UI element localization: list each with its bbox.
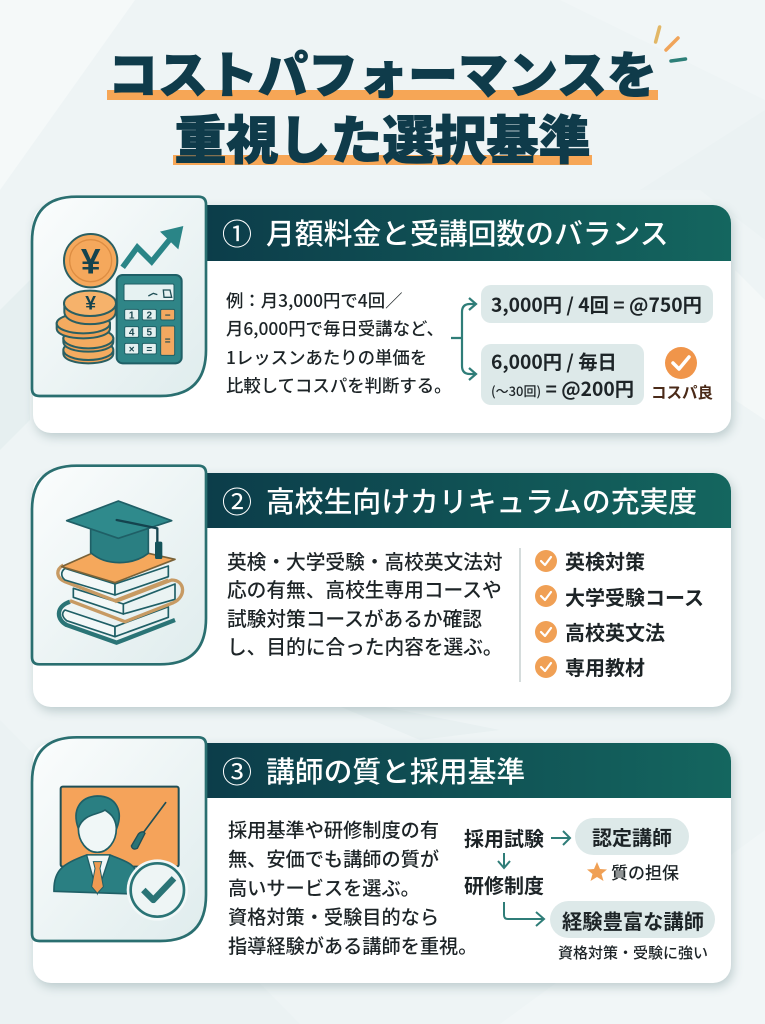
- text: 750 yen per lesson: 3,000円 / 4回 = @750円: [491, 290, 702, 318]
- text: 200 yen per lesson: [491, 347, 634, 402]
- icon: coins and calculator: =: [165, 336, 171, 347]
- text: card 2 description: 英検・大学受験・高校英文法対: [227, 546, 503, 575]
- heading: card 1: [207, 205, 731, 261]
- heading: card 2: [207, 473, 731, 528]
- pill: 6,000 yen price: [481, 344, 644, 405]
- flow: hiring exam: 採用試験: [464, 823, 544, 852]
- panel: card 2: [33, 473, 731, 707]
- text: card 2 description: し、目的に合った内容を選ぶ。: [227, 631, 503, 660]
- divider: [519, 548, 520, 682]
- pill: certified teacher: [575, 818, 689, 855]
- heading: card 3: 講師の質と採用基準: [266, 750, 525, 791]
- panel: card 3: [33, 743, 731, 983]
- icon: teacher with check: [30, 736, 208, 942]
- text: card 1 description: 例：月3,000円で4回／: [226, 288, 402, 313]
- arrow: to certified teacher: [551, 830, 572, 846]
- list item: 大学受験コース: [565, 582, 704, 611]
- icon: orange check: [665, 347, 697, 379]
- text: 200 yen per lesson: 6,000円 / 毎日: [491, 347, 617, 375]
- text: card 2 description: [227, 546, 503, 660]
- icon: coins and calculator: 5: [147, 328, 153, 339]
- heading: card 1: 月額料金と受講回数のバランス: [266, 212, 669, 253]
- heading: card 2: 高校生向けカリキュラムの充実度: [266, 480, 697, 521]
- text: card 2 description: 応の有無、高校生専用コースや: [227, 574, 502, 603]
- title underline 2: [173, 155, 592, 165]
- text: card 2 description: 試験対策コースがあるか確認: [227, 603, 482, 632]
- text: card 3 description: 資格対策・受験目的なら: [228, 902, 439, 930]
- panel: card 1: [33, 205, 731, 433]
- text: card 3 description: 高いサービスを選ぶ。: [228, 873, 420, 901]
- text: card 3 description: [228, 815, 477, 959]
- label: good value: コスパ良: [651, 381, 713, 403]
- text: strong for exams: 資格対策・受験に強い: [558, 942, 708, 963]
- icon: coins and calculator: ¥: [85, 293, 96, 314]
- title line 2: 重視した選択基準: [174, 99, 590, 174]
- flow: training system: 研修制度: [464, 870, 544, 899]
- heading: card 1: ①: [222, 210, 252, 254]
- icon: coins and calculator: ¥: [81, 242, 101, 281]
- icon: coins and calculator: −: [165, 310, 171, 321]
- text: 200 yen per lesson: (〜30回) = @200円: [491, 374, 634, 402]
- heading: card 3: ③: [222, 748, 252, 792]
- text: card 3 description: 無、安価でも講師の質が: [228, 844, 439, 872]
- icon: graduation cap and books: [30, 464, 208, 666]
- text: card 1 description: [226, 288, 452, 398]
- arrow: to experienced teacher: [503, 902, 546, 927]
- text: card 1 description: 月6,000円で毎日受講など、: [226, 316, 444, 341]
- icon: coins and calculator: 2: [147, 310, 153, 321]
- icon: title sparks: [654, 25, 688, 63]
- pill: experienced teacher: [550, 901, 715, 938]
- text: card 3 description: 採用基準や研修制度の有: [228, 815, 439, 843]
- text: card 1 description: 比較してコスパを判断する。: [226, 373, 452, 398]
- title underline 1: [107, 90, 658, 100]
- list item: 専用教材: [565, 652, 645, 681]
- text: card 3 description: 指導経験がある講師を重視。: [228, 931, 477, 959]
- text: quality assurance: 質の担保: [611, 859, 679, 884]
- arrow: branching to prices: [451, 297, 478, 381]
- icon: coins and calculator: ×: [129, 344, 135, 355]
- icon: coins and calculator: 1: [129, 310, 135, 321]
- pill: 3,000 yen price: [481, 285, 713, 323]
- text: card 1 description: 1レッスンあたりの単価を: [226, 345, 427, 370]
- text: experienced teacher: 経験豊富な講師: [562, 905, 704, 935]
- text: certified teacher: 認定講師: [592, 822, 672, 851]
- icon: coins and calculator: =: [146, 344, 152, 355]
- heading: card 3: [207, 743, 731, 798]
- icon: coins and calculator: 4: [129, 328, 135, 339]
- icons: orange checks: [535, 550, 557, 678]
- list item: 英検対策: [565, 546, 645, 575]
- icon: star: [587, 862, 607, 881]
- heading: card 2: ②: [222, 478, 252, 522]
- title line 1: コストパフォーマンスを: [108, 36, 657, 108]
- arrow: down to training: [497, 853, 511, 870]
- list item: 高校英文法: [565, 617, 665, 646]
- icon: coins and calculator: [30, 195, 208, 398]
